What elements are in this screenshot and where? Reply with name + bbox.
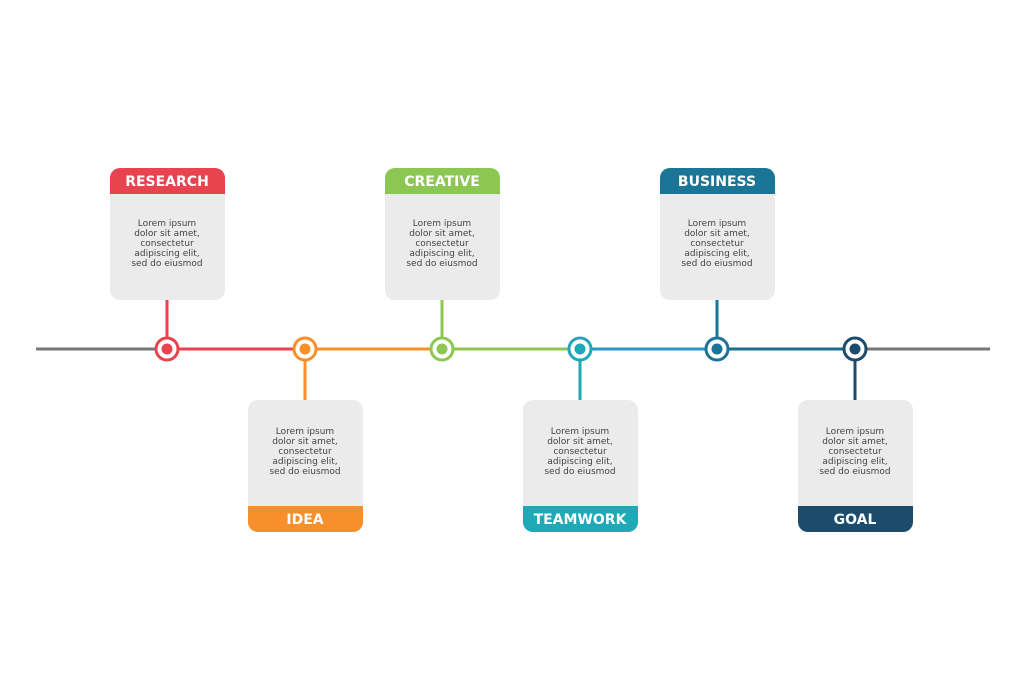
step: business: dolor sit amet,	[684, 229, 750, 239]
step: goal: adipiscing elit,	[822, 457, 888, 467]
step: teamwork: dolor sit amet,	[547, 437, 613, 447]
step: creative: CREATIVE	[404, 174, 480, 190]
step: idea: sed do eiusmod	[269, 467, 341, 477]
step: goal: sed do eiusmod	[819, 467, 891, 477]
step: goal: dolor sit amet,	[822, 437, 888, 447]
step: idea: Lorem ipsum	[276, 427, 334, 437]
step: business: sed do eiusmod	[681, 259, 753, 269]
step: teamwork: sed do eiusmod	[544, 467, 616, 477]
step: creative: dolor sit amet,	[409, 229, 475, 239]
step: idea	[248, 338, 363, 532]
step: business: consectetur	[690, 239, 744, 249]
step: business: adipiscing elit,	[684, 249, 750, 259]
step: creative: adipiscing elit,	[409, 249, 475, 259]
step: goal: consectetur	[828, 447, 882, 457]
timeline line	[36, 348, 990, 350]
step: research: adipiscing elit,	[134, 249, 200, 259]
step: business: BUSINESS	[678, 174, 756, 190]
step: teamwork: Lorem ipsum	[551, 427, 609, 437]
step: idea: adipiscing elit,	[272, 457, 338, 467]
step: research: sed do eiusmod	[131, 259, 203, 269]
step: goal: GOAL	[834, 512, 876, 528]
step: research: consectetur	[140, 239, 194, 249]
step: creative: sed do eiusmod	[406, 259, 478, 269]
step: creative: consectetur	[415, 239, 469, 249]
step: idea: consectetur	[278, 447, 332, 457]
step: idea: dolor sit amet,	[272, 437, 338, 447]
step: goal	[798, 338, 913, 532]
step: goal: Lorem ipsum	[826, 427, 884, 437]
step: creative: Lorem ipsum	[413, 219, 471, 229]
step: research: RESEARCH	[125, 174, 209, 190]
step: idea: IDEA	[286, 512, 324, 528]
step: research: dolor sit amet,	[134, 229, 200, 239]
step: business	[660, 168, 775, 360]
step: creative	[385, 168, 500, 360]
step: teamwork: adipiscing elit,	[547, 457, 613, 467]
step: teamwork: TEAMWORK	[534, 512, 628, 528]
step: research: Lorem ipsum	[138, 219, 196, 229]
step: teamwork	[523, 338, 638, 532]
step: business: Lorem ipsum	[688, 219, 746, 229]
step: teamwork: consectetur	[553, 447, 607, 457]
step: research	[110, 168, 225, 360]
